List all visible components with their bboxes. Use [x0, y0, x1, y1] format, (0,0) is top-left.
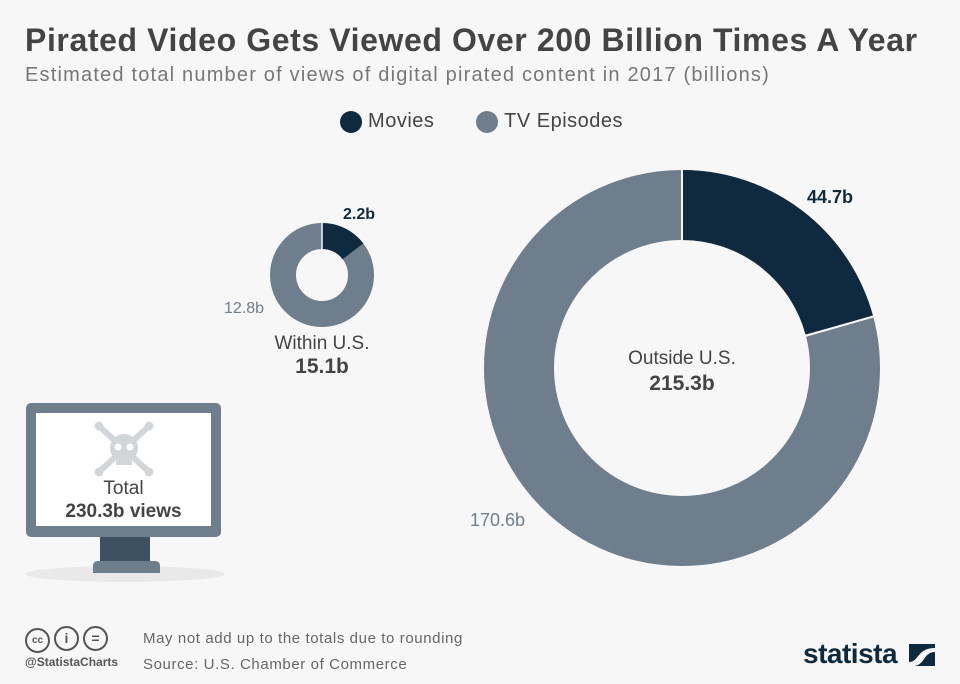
donut: outside US [519, 168, 875, 531]
title: Pirated Video Gets Viewed Over 200 Billion Times A Year [25, 22, 918, 58]
monitor text: Total [103, 478, 144, 499]
footnotes: May not add up to the totals due to rounding [143, 630, 463, 647]
monitor text [65, 478, 182, 522]
cc icons: i [65, 630, 68, 646]
footnotes [143, 630, 463, 673]
label: within US: 15.1b [295, 355, 349, 378]
label: within US: Within U.S. [274, 333, 370, 354]
label: outside US [628, 348, 736, 395]
label: 170.6b: 170.6b [470, 510, 525, 530]
label: outside US: 215.3b [649, 372, 715, 395]
monitor text: 230.3b views [65, 501, 182, 522]
monitor icon [25, 403, 225, 582]
donut: within US [283, 220, 361, 314]
footnotes: Source: U.S. Chamber of Commerce [143, 656, 407, 673]
cc icons: cc [32, 635, 43, 646]
subtitle: Estimated total number of views of digital pirated content in 2017 (billions) [25, 64, 770, 86]
cc icons [25, 626, 108, 653]
icon: skull and crossbones [95, 422, 153, 476]
label: outside US: Outside U.S. [628, 348, 736, 369]
label: within US [274, 333, 370, 378]
label: 12.8b: 12.8b [224, 300, 264, 317]
label: 44.7b: 44.7b [807, 187, 853, 207]
statista logo: statista [803, 638, 897, 669]
legend: Movies TV Episodes [368, 110, 623, 132]
cc icons: = [91, 630, 100, 646]
label: 2.2b: 2.2b [343, 206, 375, 223]
handle: @StatistaCharts [25, 655, 118, 669]
